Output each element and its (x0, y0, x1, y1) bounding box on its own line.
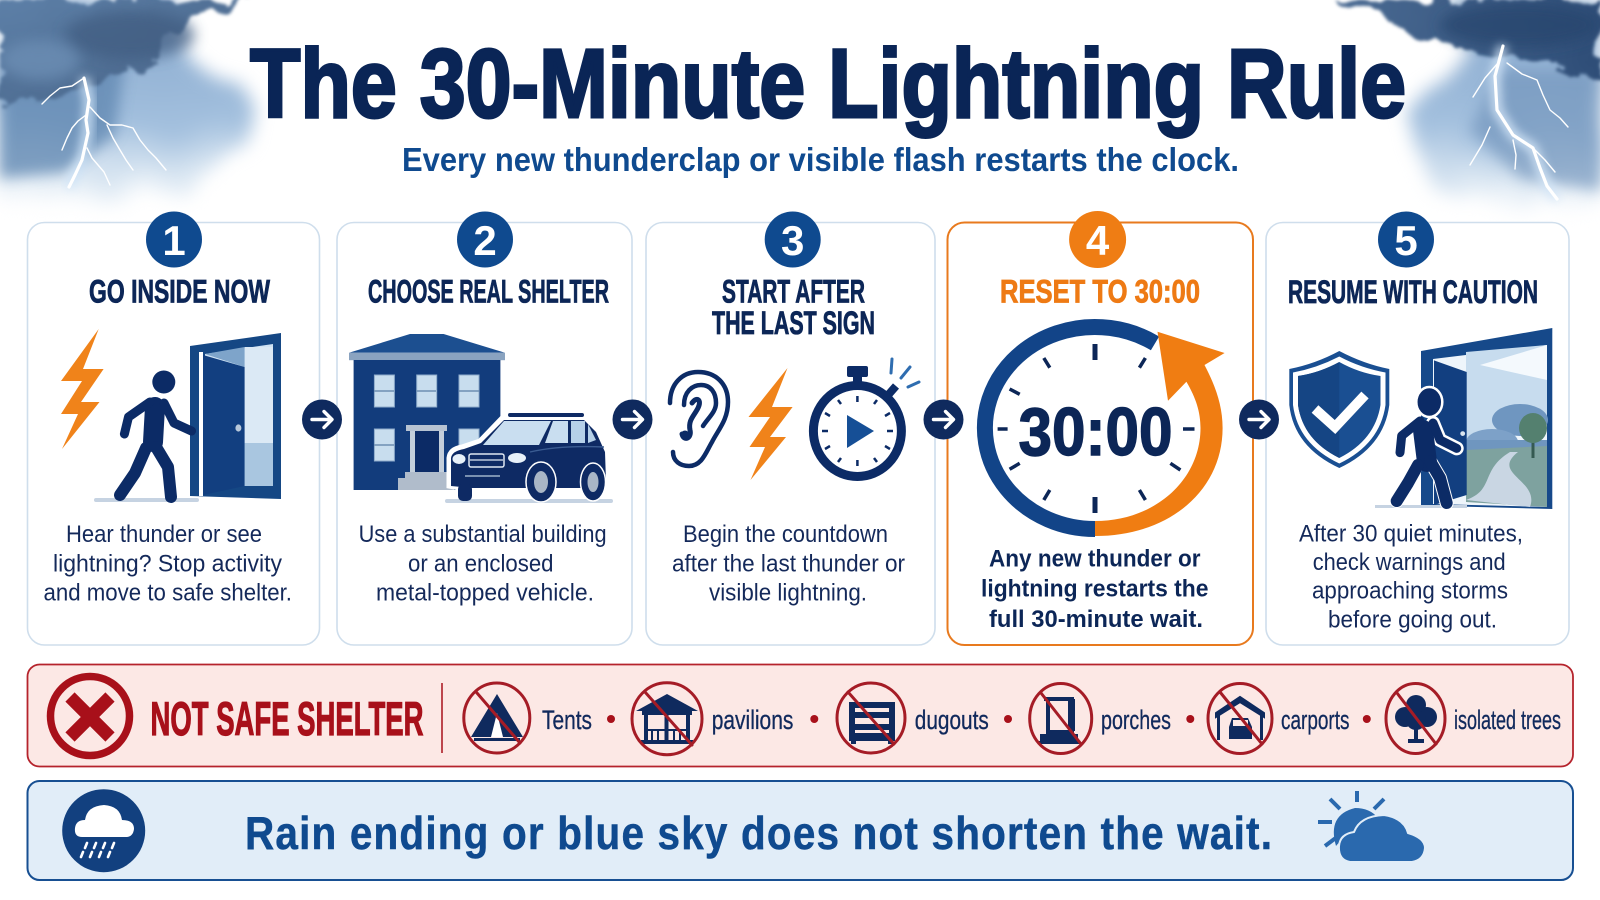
heading: START AFTER (722, 274, 865, 310)
panel: step 3 start after the last sign (646, 212, 935, 645)
body text: check warnings and (1313, 549, 1506, 576)
panel: step 4 reset to 30:00 (948, 211, 1253, 645)
body text: Begin the countdown (683, 521, 888, 548)
icon: walking person (94, 370, 199, 502)
step number 3 (765, 212, 821, 268)
arrow 1 to 2 (302, 400, 342, 440)
step number 4 (1069, 211, 1126, 268)
body text: before going out. (1328, 606, 1497, 634)
step number 5 (1378, 212, 1434, 268)
panel: rain reminder (28, 781, 1573, 880)
item: carports (1208, 684, 1350, 754)
body text: visible lightning. (709, 580, 867, 606)
icon: sun and cloud (1318, 791, 1425, 862)
storm cloud: top right (1337, 0, 1600, 215)
icon: stopwatch (813, 359, 919, 476)
separator dot (810, 715, 818, 723)
body text (1299, 520, 1523, 634)
step number 5: 5 (1394, 217, 1418, 264)
body text (981, 546, 1208, 633)
body text: after the last thunder or (672, 550, 905, 578)
arrow 4 to 5 (1239, 400, 1279, 440)
icon: red X (50, 676, 130, 756)
body text: lightning restarts the (981, 576, 1208, 602)
separator dot (607, 715, 615, 723)
body text: approaching storms (1312, 578, 1508, 604)
panel: step 2 choose real shelter (337, 212, 632, 645)
item: porches (1030, 684, 1171, 754)
item: isolated trees (1386, 684, 1561, 754)
body text (359, 521, 607, 606)
chart: 30-minute reset clock: 30:00 (1018, 394, 1172, 470)
body text: or an enclosed (408, 550, 554, 578)
item: porches: porches (1101, 705, 1171, 735)
body text: Hear thunder or see (66, 521, 262, 548)
chart: 30-minute reset clock (985, 327, 1225, 536)
item: dugouts: dugouts (915, 705, 989, 735)
step number 1: 1 (162, 217, 186, 264)
body text: Any new thunder or (989, 546, 1200, 572)
storm cloud: top left (0, 0, 252, 205)
icon: building (349, 334, 505, 490)
message: Rain ending or blue sky does not shorten the wait. (245, 809, 1272, 860)
panel: not safe shelter (28, 664, 1573, 766)
item: dugouts (837, 683, 989, 753)
heading: RESET TO 30:00 (1000, 274, 1200, 310)
arrow 3 to 4 (924, 400, 964, 440)
step number 4: 4 (1086, 217, 1110, 264)
separator dot (1004, 715, 1012, 723)
icon: door to clear landscape (1421, 328, 1552, 509)
icon: shield with check (1289, 351, 1389, 468)
icon: lightning bolt (748, 368, 793, 480)
step number 3: 3 (781, 217, 804, 264)
item: tents (464, 683, 592, 753)
separator dot (1363, 715, 1371, 723)
body text: and move to safe shelter. (44, 580, 292, 606)
body text: lightning? Stop activity (53, 550, 282, 578)
body text: After 30 quiet minutes, (1299, 520, 1523, 548)
heading: CHOOSE REAL SHELTER (368, 274, 609, 310)
item: pavilions (632, 683, 793, 755)
icon: open door (190, 333, 281, 499)
step number 2 (457, 212, 513, 268)
heading: NOT SAFE SHELTER (150, 692, 424, 745)
step number 1 (146, 212, 202, 268)
icon: SUV (445, 413, 613, 503)
item: carports: carports (1281, 705, 1350, 735)
body text (672, 521, 905, 606)
body text: full 30-minute wait. (989, 606, 1203, 633)
item: tents: Tents (542, 705, 592, 735)
subtitle: Every new thunderclap or visible flash restarts the clock. (402, 141, 1239, 178)
title: The 30-Minute Lightning Rule (250, 29, 1406, 138)
icon: ear (670, 372, 728, 466)
icon: walking person (1375, 387, 1467, 508)
body text: metal-topped vehicle. (376, 580, 594, 606)
separator dot (1186, 715, 1194, 723)
heading: THE LAST SIGN (712, 305, 875, 341)
icon: rain cloud (62, 789, 145, 872)
step number 2: 2 (473, 217, 497, 264)
icon: lightning bolt (61, 329, 104, 449)
panel: step 5 resume with caution (1266, 212, 1569, 645)
heading (712, 274, 875, 341)
arrow 2 to 3 (612, 400, 652, 440)
panel: step 1 go inside now (28, 212, 320, 645)
body text: Use a substantial building (359, 521, 607, 548)
heading: GO INSIDE NOW (89, 274, 271, 310)
item: pavilions: pavilions (712, 705, 793, 735)
body text (44, 521, 292, 606)
